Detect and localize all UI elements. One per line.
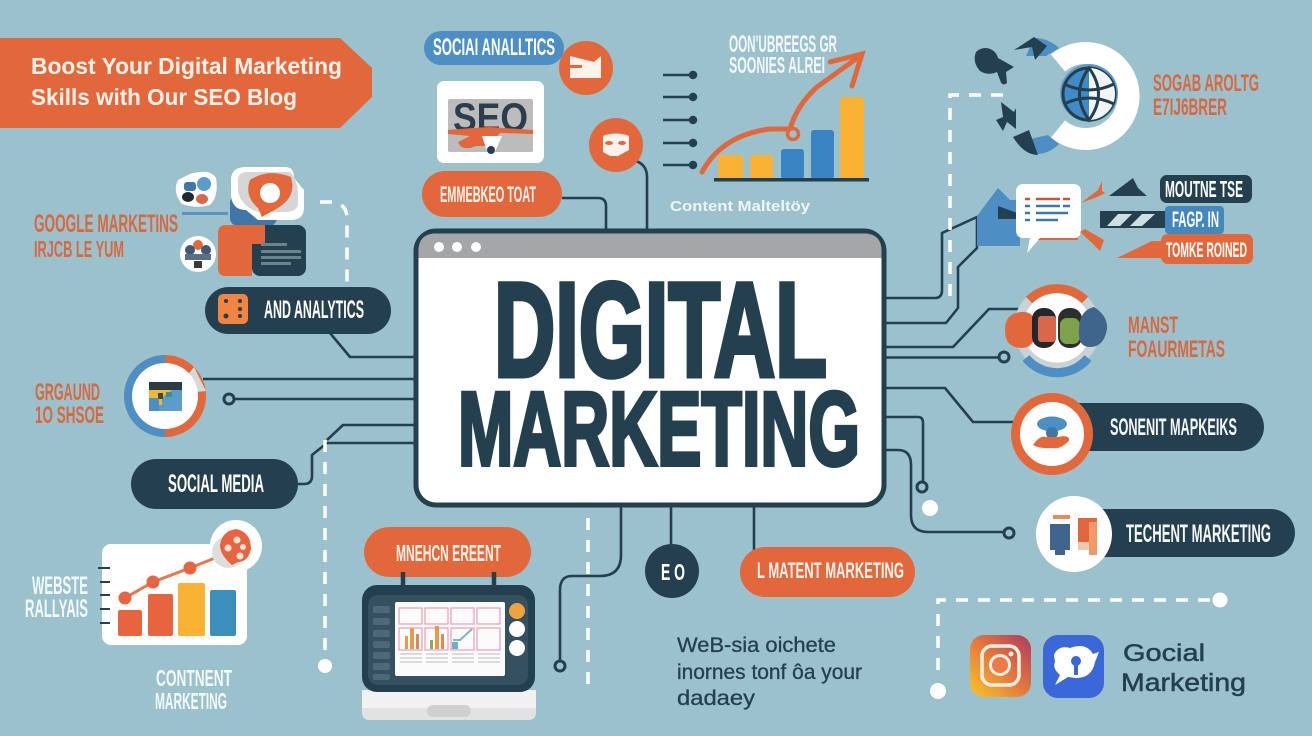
main window: Digital Marketing: [416, 231, 884, 505]
icon: people ring: [1005, 289, 1107, 373]
pill: and analytics: AND ANALYTICS: [264, 296, 364, 324]
label: social analytics: [1153, 70, 1259, 121]
icon: SEO card: [437, 81, 544, 163]
connector wires: [203, 161, 1025, 671]
label: google marketing: IRJCB LE YUM: [34, 236, 124, 262]
label: content marketing: CONTNENT: [156, 665, 232, 691]
icon: globe ring: [975, 37, 1129, 155]
tag: blue: [1165, 206, 1224, 234]
label: website analysis: RALLYAIS: [25, 595, 88, 623]
pill: latent marketing: [740, 547, 915, 597]
circle: E.O: [645, 544, 699, 598]
label: social marketing: Marketing: [1121, 669, 1246, 697]
pill: latent marketing: L MATENT MARKETING: [757, 558, 904, 583]
pill: orange tablet label: [364, 527, 531, 577]
caption: Social Marketing with app icons: [970, 635, 1246, 698]
circle: E.O: E O: [661, 559, 685, 585]
label: forums: MANST: [1128, 312, 1178, 339]
icon: small people bubble: [180, 236, 216, 272]
icon cluster: chat and card: [176, 167, 306, 276]
pill: social media: SOCIAL MEDIA: [168, 470, 264, 498]
icon: blue bird bubble: [1043, 635, 1104, 698]
label: content marketing: [155, 665, 232, 714]
main window: Digital Marketing: MARKETING: [458, 371, 860, 488]
tag: orange: [1161, 234, 1253, 264]
tag: dark: MOUTNE TSE: [1165, 176, 1243, 202]
pill: social media: [131, 459, 298, 509]
banner: blog title: [0, 38, 372, 128]
chart caption: SOONIES ALREI: [729, 52, 825, 78]
label: forums: FOAURMETAS: [1128, 336, 1225, 363]
main window: Digital Marketing: DIGITAL: [494, 256, 827, 405]
icon: ring with image: [124, 355, 206, 437]
label: social marketing: [1121, 640, 1246, 697]
label: website analysis: [25, 572, 88, 623]
label: forums: [1128, 312, 1225, 363]
label: brand: 1O SHSOE: [35, 402, 104, 429]
chart caption: [729, 31, 837, 78]
text block: website note: dadaey: [677, 687, 756, 710]
label: brand: GRGAUND: [35, 379, 100, 406]
icon: SEO card: SEO: [453, 96, 528, 140]
caption: content marketing: Content Malteltöy: [670, 198, 811, 215]
pill: orange label: [422, 171, 562, 217]
icon: small palette bubble: [176, 172, 217, 207]
icon: instagram: [970, 635, 1031, 697]
icon: orange envelope circle: [559, 41, 613, 95]
pill: social analytics: [424, 31, 564, 65]
tag: dark: [1160, 175, 1252, 203]
pill: technical marketing with icon: [1036, 496, 1295, 572]
label: google marketing: [34, 210, 178, 262]
dashed guide lines: [318, 95, 1228, 699]
banner: blog title: Boost Your Digital Marketing: [31, 53, 342, 79]
text block: website note: inornes tonf ôa your: [677, 661, 862, 684]
label: website analysis: WEBSTE: [32, 572, 88, 600]
label: content marketing: MARKETING: [155, 688, 227, 714]
label: brand: [35, 379, 104, 429]
pill: orange tablet label: MNEHCN EREENT: [396, 540, 501, 566]
bar chart with growth arrow: [702, 54, 869, 182]
notebook bar chart: [98, 520, 262, 645]
text: OON'UBREEGS GR: [729, 31, 837, 58]
pill: content marketing with icon: [1016, 398, 1264, 470]
pill: orange label: EMMEBKEO TOAT: [440, 182, 536, 207]
pill: social analytics: SOCIAI ANALLTICS: [433, 34, 555, 61]
icon: house and speech bubble: [977, 181, 1105, 253]
text block: website note: [677, 634, 862, 710]
text block: website note: WeB-sia oichete: [677, 634, 836, 657]
label: google marketing: GOOGLE MARKETINS: [34, 210, 178, 238]
pill: and analytics: [205, 287, 391, 334]
label: social marketing: Gocial: [1123, 640, 1205, 667]
list ticks: [663, 72, 696, 168]
icon: orange mask circle: [589, 118, 643, 172]
tablet dashboard: [362, 572, 536, 720]
arrow shapes and right tags: [1100, 175, 1253, 264]
banner: blog title: Skills with Our SEO Blog: [31, 84, 297, 110]
tag: blue: FAGP. IN: [1172, 207, 1219, 232]
label: social analytics: E7IJ6BRER: [1153, 94, 1227, 121]
